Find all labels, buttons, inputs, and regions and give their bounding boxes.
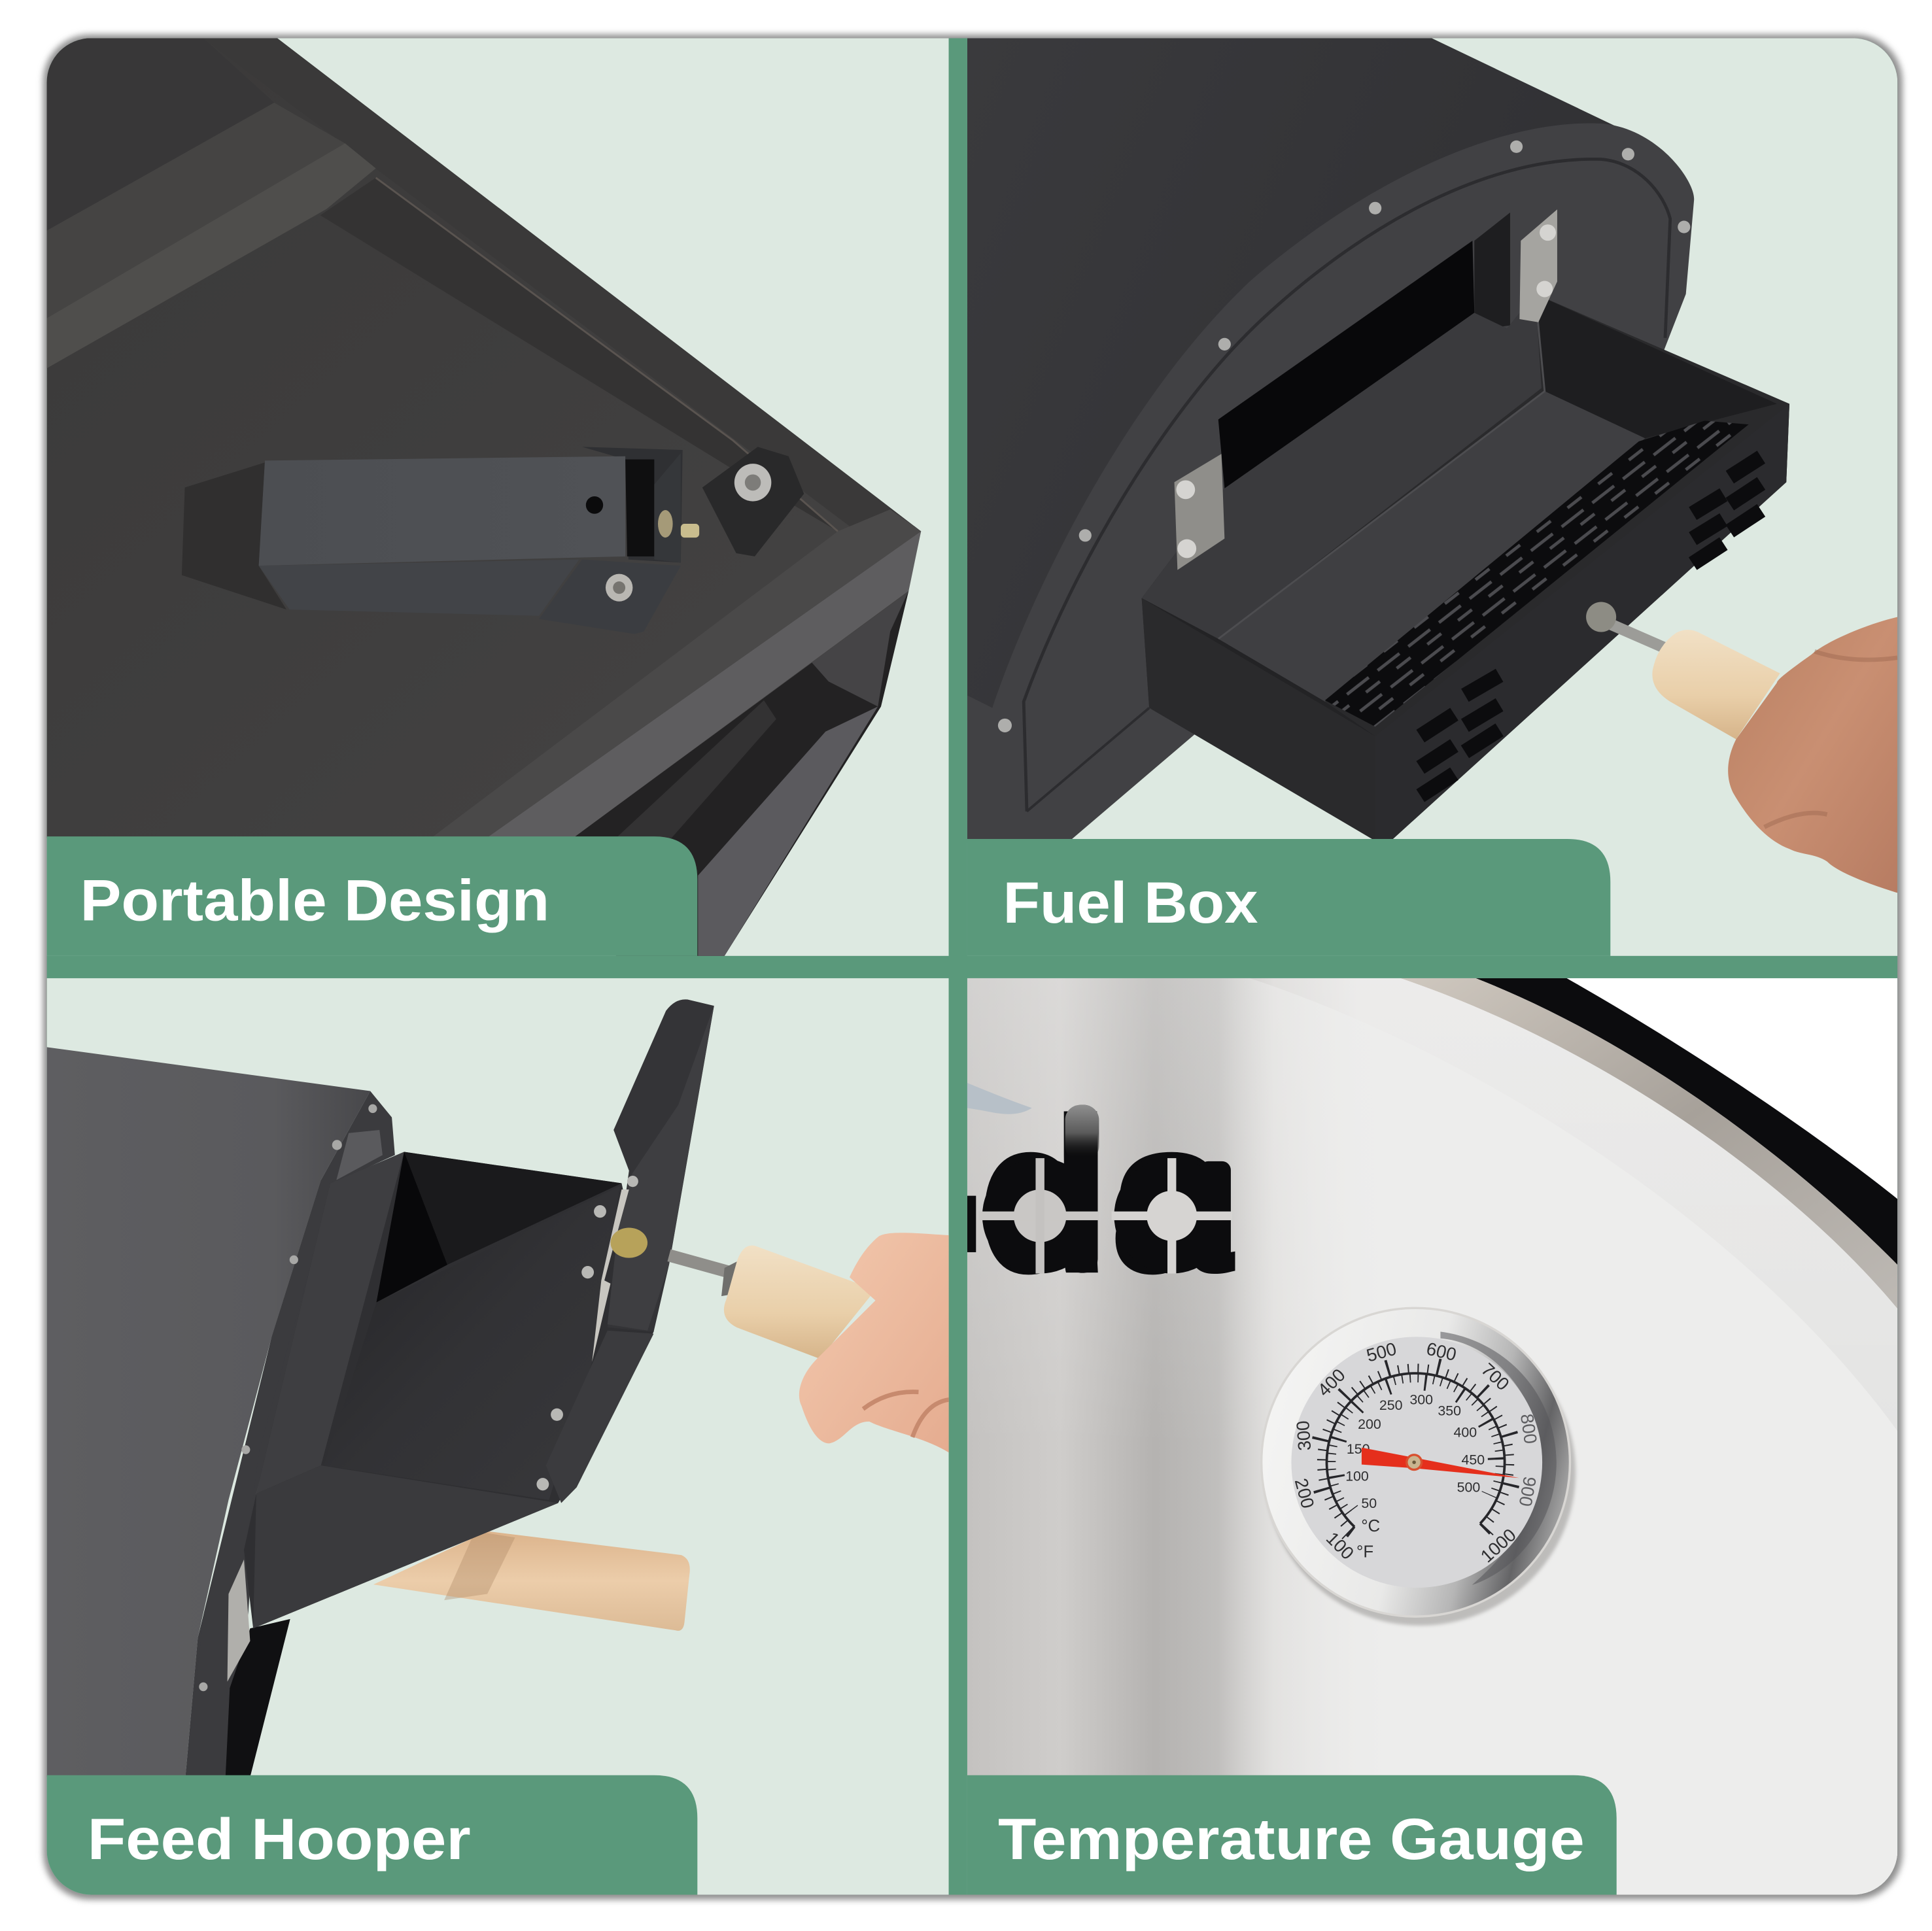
fahrenheit labels: 500	[1364, 1339, 1398, 1365]
photo: oven base frame	[46, 38, 921, 957]
fahrenheit labels: 200	[1291, 1476, 1319, 1511]
temperature gauge dial	[1262, 1308, 1576, 1626]
dial face	[1291, 1337, 1542, 1588]
celsius labels: °C	[1361, 1517, 1380, 1535]
wooden stick	[373, 1531, 690, 1631]
fahrenheit labels: 300	[1292, 1420, 1315, 1452]
photo: oven with fuel tray	[967, 38, 1897, 893]
fahrenheit labels: 400	[1313, 1365, 1349, 1400]
logo cutout: da	[977, 1074, 1233, 1318]
fahrenheit labels: 600	[1424, 1339, 1458, 1365]
tick marks	[1319, 1365, 1513, 1537]
needle	[1362, 1448, 1519, 1478]
celsius labels: 400	[1454, 1424, 1477, 1440]
photo: oven with hopper	[47, 999, 950, 1777]
label tab: fuel box	[967, 839, 1610, 956]
celsius labels: 250	[1379, 1397, 1403, 1413]
label tab: feed hopper	[47, 1775, 697, 1894]
celsius labels: 200	[1358, 1416, 1381, 1432]
fahrenheit labels: 700	[1477, 1359, 1513, 1394]
celsius labels	[1345, 1392, 1485, 1562]
hand	[1728, 617, 1897, 893]
fahrenheit labels: 100	[1322, 1528, 1358, 1564]
rivets	[199, 1104, 377, 1691]
photo: steel oven door	[967, 978, 1897, 1901]
hinges	[1175, 209, 1557, 570]
panel: portable design	[46, 38, 949, 957]
heading: fuel box: Fuel Box	[1003, 870, 1258, 935]
celsius labels: °F	[1356, 1543, 1373, 1562]
fahrenheit labels: 1000	[1477, 1524, 1520, 1566]
folding leg bracket	[259, 447, 699, 634]
label tab: portable design	[47, 836, 697, 956]
corner bracket with screw	[702, 447, 804, 556]
celsius labels: 100	[1345, 1468, 1369, 1484]
fahrenheit labels: 800	[1517, 1412, 1541, 1445]
vents	[1421, 457, 1761, 796]
heading: feed hopper: Feed Hooper	[88, 1806, 471, 1871]
celsius labels: 300	[1409, 1392, 1433, 1407]
panel: feed hopper	[47, 978, 950, 1894]
heading: portable design: Portable Design	[80, 867, 549, 932]
panel: fuel box	[967, 38, 1897, 956]
bracket shadow	[182, 462, 286, 609]
celsius labels: 150	[1347, 1441, 1370, 1457]
tray	[1142, 294, 1789, 841]
hopper	[244, 999, 714, 1628]
label tab: temperature gauge	[967, 1775, 1617, 1894]
fahrenheit labels: 900	[1515, 1475, 1540, 1508]
panel: temperature gauge	[967, 978, 1897, 1901]
celsius labels: 450	[1462, 1452, 1485, 1468]
heading: temperature gauge: Temperature Gauge	[998, 1806, 1585, 1871]
rivets	[998, 141, 1690, 732]
celsius labels: 500	[1457, 1480, 1480, 1495]
hinge plate	[228, 1560, 250, 1682]
fahrenheit labels	[1291, 1339, 1541, 1566]
celsius labels: 350	[1438, 1403, 1461, 1419]
threaded rod and handle	[1586, 602, 1780, 739]
hand	[799, 1233, 950, 1453]
celsius labels: 50	[1361, 1495, 1377, 1511]
threaded rod and handle	[669, 1246, 876, 1359]
